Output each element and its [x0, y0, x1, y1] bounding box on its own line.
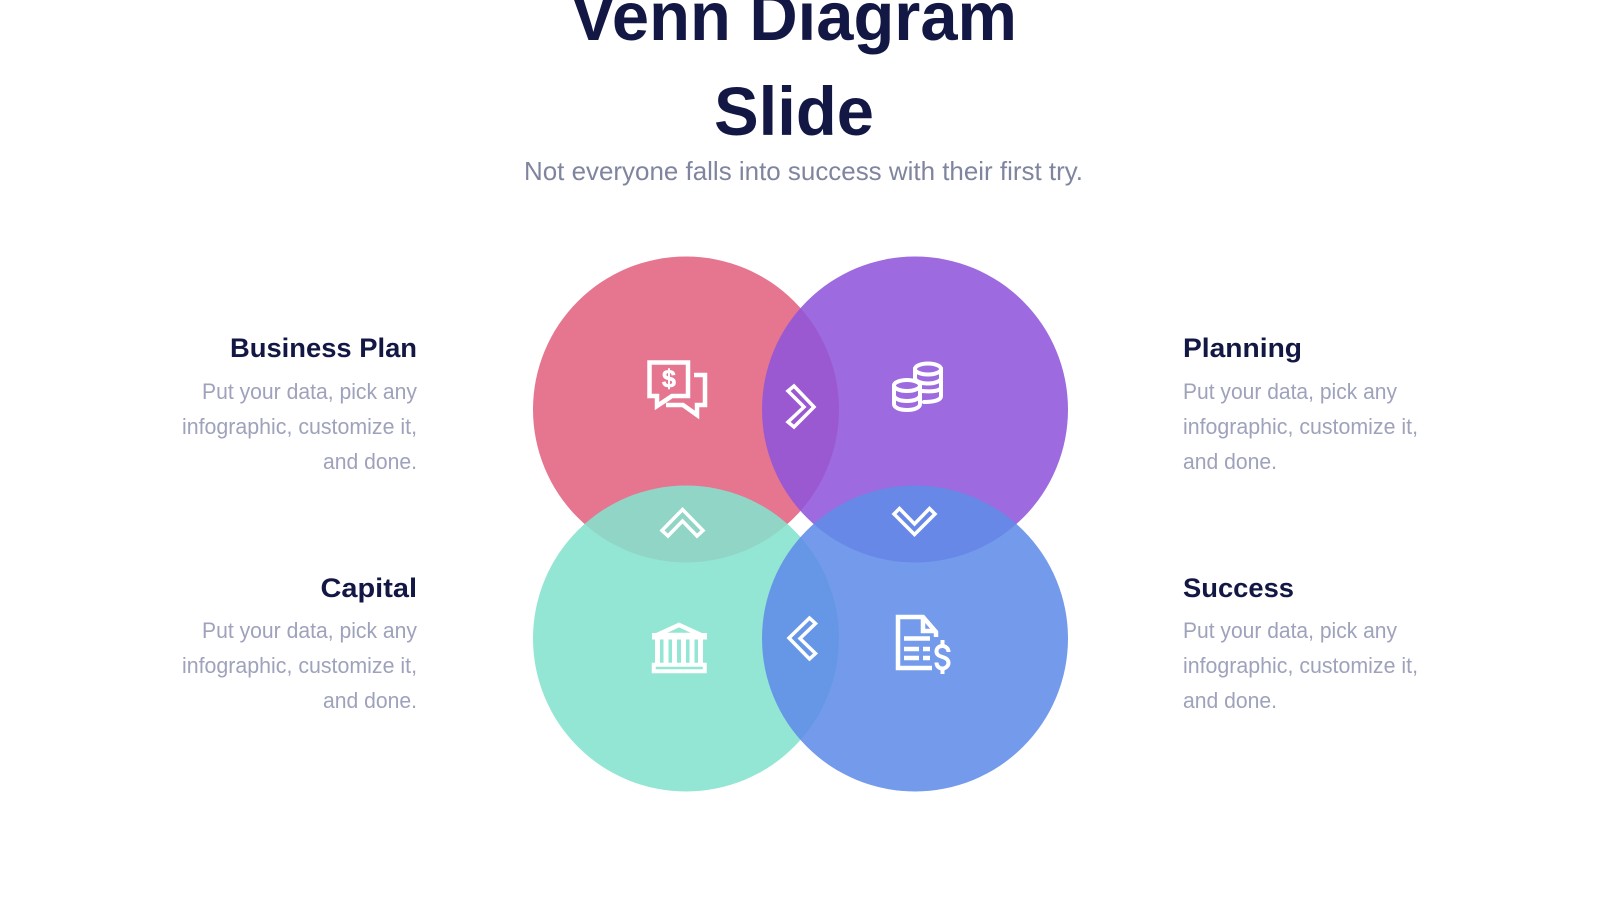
- icon: document with dollar: [898, 617, 948, 674]
- subtitle: Not everyone falls into success with their first try.: [524, 156, 1083, 186]
- heading: success: Success: [1183, 573, 1294, 603]
- panel: success: [1183, 573, 1418, 713]
- text block: success: [1183, 618, 1418, 713]
- arrow: right chevron: [788, 386, 814, 427]
- text block: planning: [1183, 379, 1418, 474]
- title: Slide: [714, 73, 874, 150]
- text block: business plan: Put your data, pick any: [202, 379, 417, 404]
- text block: success: and done.: [1183, 688, 1277, 713]
- circle: capital: [533, 486, 839, 792]
- text block: capital: and done.: [323, 688, 417, 713]
- icon: chat bubbles with dollar: $: [662, 365, 676, 393]
- text block: planning: Put your data, pick any: [1183, 379, 1397, 404]
- heading: planning: Planning: [1183, 333, 1302, 363]
- circle: business plan: [533, 256, 839, 562]
- text block: business plan: and done.: [323, 449, 417, 474]
- icon: chat bubbles with dollar: [650, 362, 705, 415]
- arrow: left chevron: [789, 618, 816, 659]
- icon: bank building: [652, 625, 707, 671]
- panel: capital: [182, 573, 417, 713]
- heading: business plan: Business Plan: [230, 333, 417, 363]
- arrow: down chevron: [894, 508, 935, 534]
- panel: planning: [1183, 333, 1418, 474]
- text block: capital: infographic, customize it,: [182, 653, 417, 678]
- text block: success: Put your data, pick any: [1183, 618, 1397, 643]
- text block: business plan: [182, 379, 417, 474]
- icon: coin stacks: [894, 364, 941, 410]
- text block: planning: infographic, customize it,: [1183, 414, 1418, 439]
- text block: business plan: infographic, customize it,: [182, 414, 417, 439]
- text block: success: infographic, customize it,: [1183, 653, 1418, 678]
- text block: capital: [182, 618, 417, 713]
- panel: business plan: [182, 333, 417, 474]
- arrow: up chevron: [662, 510, 703, 536]
- venn diagram: [533, 256, 1068, 792]
- heading: capital: Capital: [320, 573, 417, 603]
- title: [571, 0, 1017, 150]
- text block: planning: and done.: [1183, 449, 1277, 474]
- text block: capital: Put your data, pick any: [202, 618, 417, 643]
- circle: success: [762, 486, 1068, 792]
- circle: planning: [762, 256, 1068, 562]
